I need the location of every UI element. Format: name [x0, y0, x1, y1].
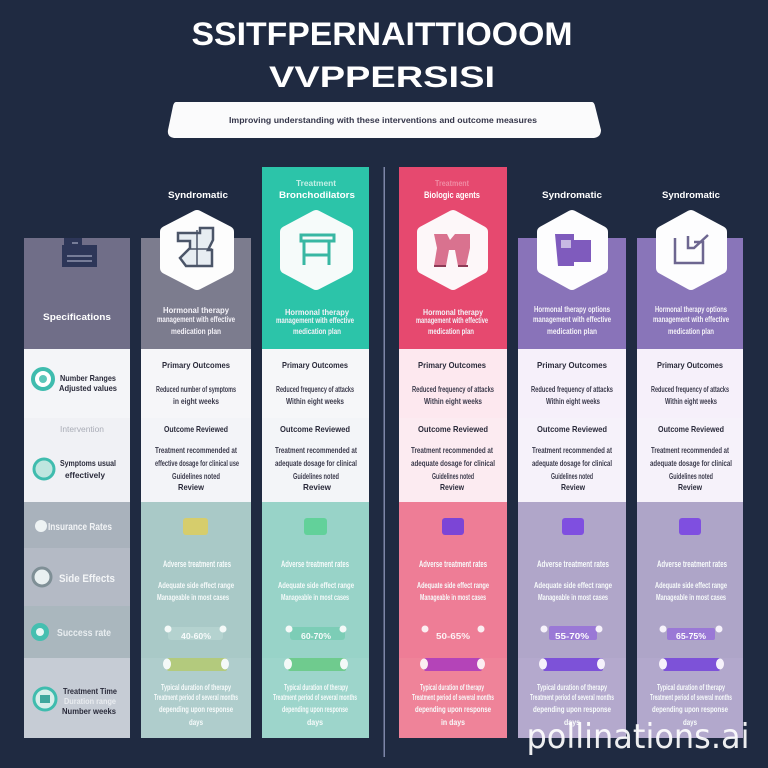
row label 2: Intervention [60, 425, 104, 434]
cell: row 1: Primary Outcomes [537, 360, 607, 370]
cell: row 2: Outcome Reviewed [164, 424, 228, 434]
header description: management with effective [653, 315, 729, 324]
range pill: 40-60% [181, 632, 211, 641]
cell: row 6: in days [441, 718, 465, 727]
cell: row 2 [532, 424, 612, 492]
cell: row 4 [157, 559, 234, 602]
cell: row 6 [530, 683, 614, 727]
column label: Specifications [43, 312, 111, 322]
cell: row 1: Reduced frequency of attacks [412, 385, 494, 394]
rating chip [679, 518, 701, 535]
icon: hexagon badge [423, 216, 482, 284]
cell: row 1: Within eight weeks [424, 397, 482, 406]
cell: row 6: days [189, 718, 203, 727]
range bar [539, 658, 605, 671]
cell: row 6: depending upon response [652, 705, 728, 714]
row label 4: Side Effects [59, 573, 115, 585]
cell: row 4 [278, 559, 354, 602]
header description [533, 305, 611, 336]
cell: row 2: Outcome Reviewed [280, 424, 350, 434]
cell: row 2: adequate dosage for clinical [411, 459, 495, 468]
cell: row 6: Typical duration of therapy [420, 683, 484, 692]
rating chip [304, 518, 327, 535]
title: VVPPERSISI [269, 61, 495, 94]
cell: row 4: Manageable in most cases [281, 593, 349, 602]
cell: row 4 [534, 559, 612, 602]
cell: row 1: Primary Outcomes [418, 360, 486, 370]
panel: row labels column [24, 238, 130, 738]
row label 1: Number Ranges [60, 373, 116, 383]
row label 6: Duration range [64, 697, 116, 706]
cell: row 6 [650, 683, 732, 727]
row label 1 [33, 369, 117, 393]
row label 2 [34, 425, 116, 480]
row label 5: Success rate [57, 628, 111, 639]
cell: row 2: Outcome Reviewed [537, 424, 607, 434]
cell: row 2: Guidelines noted [293, 472, 339, 481]
cell: row 4: Adequate side effect range [158, 581, 234, 590]
row label 3: Insurance Rates [48, 522, 112, 533]
range pill: 60-70% [301, 632, 331, 641]
row label 4 [33, 568, 115, 586]
header description: Hormonal therapy options [655, 305, 727, 314]
icon: header document [62, 238, 97, 267]
cell: row 2: Guidelines noted [551, 472, 593, 481]
header description [157, 306, 235, 336]
header description [276, 308, 354, 336]
header description: medication plan [171, 327, 221, 336]
header description [416, 308, 488, 336]
cell: row 1: Reduced frequency of attacks [276, 385, 354, 394]
cell: row 1 [412, 360, 494, 406]
header description: medication plan [547, 327, 597, 336]
cell: row 4: Adverse treatment rates [419, 559, 487, 569]
cell: row 4: Adverse treatment rates [537, 559, 609, 569]
title: SSITFPERNAITTIOOOM [192, 16, 572, 52]
cell: row 2: adequate dosage for clinical [650, 459, 732, 468]
cell: row 4: Adverse treatment rates [657, 559, 727, 569]
column heading: Treatment [435, 179, 469, 188]
cell: row 4: Manageable in most cases [538, 593, 608, 602]
cell: row 2: Outcome Reviewed [658, 424, 724, 434]
row label 3 [35, 520, 112, 533]
cell: row 1 [531, 360, 613, 406]
rating chip [183, 518, 208, 535]
cell: row 2: Review [678, 482, 702, 492]
cell: row 6: depending upon response [159, 705, 233, 714]
cell: row 6: Typical duration of therapy [657, 683, 725, 692]
cell: row 2: Treatment recommended at [411, 446, 493, 455]
row label 6 [34, 686, 117, 716]
cell: row 1 [651, 360, 729, 406]
cell: row 2: Review [440, 482, 464, 492]
column heading [279, 179, 355, 200]
center divider line [384, 167, 385, 757]
cell: row 1: Reduced frequency of attacks [531, 385, 613, 394]
cell: row 2: Review [561, 482, 585, 492]
column heading [424, 179, 480, 200]
icon: hexagon badge [166, 216, 228, 284]
cell: row 2 [411, 424, 495, 492]
range pill: 55-70% [555, 632, 589, 641]
row label 2: effectively [65, 470, 105, 480]
cell: row 4: Manageable in most cases [420, 593, 486, 602]
cell: row 4: Adverse treatment rates [281, 559, 349, 569]
header description: management with effective [276, 316, 354, 325]
cell: row 1: Reduced frequency of attacks [651, 385, 729, 394]
range pill [540, 626, 602, 641]
cell: row 2: Treatment recommended at [275, 446, 357, 455]
column heading: Syndromatic [542, 190, 602, 200]
cell: row 6: Typical duration of therapy [284, 683, 348, 692]
cell: row 4: Adequate side effect range [534, 581, 612, 590]
cell: row 2: Guidelines noted [432, 472, 474, 481]
cell: row 4: Manageable in most cases [656, 593, 726, 602]
cell: row 6: Treatment period of several months [412, 693, 494, 702]
header description: medication plan [428, 327, 474, 336]
cell: row 1: Reduced number of symptoms [156, 385, 236, 394]
panel: option column 4 (purple) [518, 190, 626, 738]
cell: row 4: Adequate side effect range [655, 581, 727, 590]
cell: row 6: Treatment period of several months [154, 693, 238, 702]
header description: management with effective [157, 315, 235, 324]
cell: row 2: Guidelines noted [172, 472, 220, 481]
panel: option column 3 (pink) [399, 167, 507, 738]
cell: row 2 [650, 424, 732, 492]
cell: row 6: days [564, 718, 580, 727]
cell: row 1: Primary Outcomes [657, 360, 723, 370]
cell: row 2: Guidelines noted [669, 472, 713, 481]
cell: row 1: Within eight weeks [286, 397, 344, 406]
header description: medication plan [668, 327, 714, 336]
panel: option column 2 (teal) [262, 167, 369, 738]
panel: option column 5 (purple) [637, 190, 743, 738]
cell: row 4: Adequate side effect range [278, 581, 354, 590]
header description: Hormonal therapy [285, 308, 350, 317]
cell: row 6: days [307, 718, 323, 727]
cell: row 6: Typical duration of therapy [537, 683, 607, 692]
cell: row 2: Treatment recommended at [155, 446, 237, 455]
cell: row 4: Adverse treatment rates [163, 559, 231, 569]
row label 6: Treatment Time [63, 686, 117, 696]
icon: hexagon badge [662, 216, 721, 284]
cell: row 1: Primary Outcomes [162, 360, 230, 370]
header description: management with effective [416, 316, 488, 325]
range bar [420, 658, 485, 671]
cell: row 1 [156, 360, 236, 406]
column heading: Syndromatic [662, 190, 720, 200]
range bar [659, 658, 724, 671]
cell: row 1: in eight weeks [173, 397, 219, 406]
range pill [422, 626, 484, 641]
cell: row 6 [154, 683, 238, 727]
range pill [286, 626, 346, 641]
cell: row 6: depending upon response [533, 705, 611, 714]
row label 1: Adjusted values [59, 383, 117, 393]
header description: Hormonal therapy options [534, 305, 610, 314]
subtitle banner: Improving understanding with these interventions and outcome measures [229, 116, 538, 125]
cell: row 4: Manageable in most cases [157, 593, 229, 602]
cell: row 1: Primary Outcomes [282, 360, 348, 370]
cell: row 2: adequate dosage for clinical [275, 459, 357, 468]
range pill: 65-75% [676, 632, 706, 641]
cell: row 2: Review [178, 482, 204, 492]
title [192, 16, 572, 94]
range pill: 50-65% [436, 632, 470, 641]
header description: Hormonal therapy [163, 306, 230, 315]
range pill [660, 626, 722, 641]
rating chip [562, 518, 584, 535]
rating chip [442, 518, 464, 535]
cell: row 6 [273, 683, 357, 727]
icon: hexagon badge [543, 216, 602, 284]
cell: row 2 [155, 424, 239, 492]
header description: management with effective [533, 315, 611, 324]
cell: row 2: Review [303, 482, 331, 492]
column heading: Biologic agents [424, 190, 480, 200]
row label 6: Number weeks [62, 706, 116, 716]
range pill [164, 626, 226, 641]
cell: row 2 [275, 424, 357, 492]
row label 5 [31, 623, 111, 641]
header description: medication plan [293, 327, 341, 336]
cell: row 4 [655, 559, 727, 602]
range bar [284, 658, 348, 671]
watermark: pollinations.ai [526, 717, 750, 757]
row label 2: Symptoms usual [60, 458, 116, 468]
cell: row 6: Treatment period of several months [273, 693, 357, 702]
cell: row 6: depending upon response [415, 705, 491, 714]
cell: row 2: Outcome Reviewed [418, 424, 488, 434]
cell: row 6: Treatment period of several months [530, 693, 614, 702]
column heading: Syndromatic [168, 190, 228, 200]
panel: option column 1 (grey-teal) [141, 190, 251, 738]
cell: row 1: Within eight weeks [665, 397, 717, 406]
cell: row 2: Treatment recommended at [532, 446, 612, 455]
cell: row 1 [276, 360, 354, 406]
cell: row 4 [417, 559, 489, 602]
cell: row 2: adequate dosage for clinical [532, 459, 612, 468]
cell: row 2: Treatment recommended at [651, 446, 729, 455]
range bar [163, 658, 229, 671]
cell: row 6: days [683, 718, 697, 727]
header description [653, 305, 729, 336]
cell: row 6: Typical duration of therapy [161, 683, 231, 692]
cell: row 4: Adequate side effect range [417, 581, 489, 590]
header description: Hormonal therapy [423, 308, 483, 317]
cell: row 2: effective dosage for clinical use [155, 459, 239, 468]
column heading: Bronchodilators [279, 190, 355, 200]
cell: row 6 [412, 683, 494, 727]
subtitle banner [168, 102, 601, 138]
cell: row 1: Within eight weeks [546, 397, 600, 406]
icon: hexagon badge [286, 216, 347, 284]
cell: row 6: depending upon response [282, 705, 348, 714]
column heading: Treatment [296, 179, 336, 188]
